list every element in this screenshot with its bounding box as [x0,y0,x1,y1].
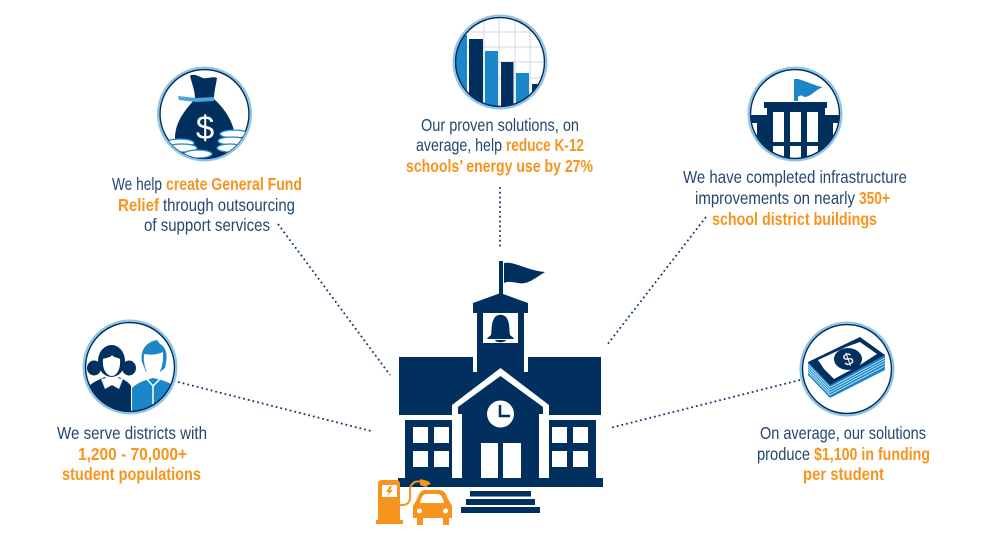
roof [399,357,601,415]
icon: money bag [158,68,251,160]
text: student populations [57,423,207,484]
icon: stack of money [800,322,894,416]
text: energy use: reduce K-12 [506,135,584,155]
dotted connector lines [178,187,800,431]
text: energy use: average, help [416,135,502,155]
flag [499,261,545,294]
text: energy use: schools’ energy use by 27% [406,156,593,176]
text: funding per student [757,423,930,484]
icon: students [84,320,176,415]
text: student populations: We serve districts with [57,423,207,443]
text: general fund relief: create General Fund [166,174,302,194]
icon: district building [748,68,842,165]
text: funding per student: $1,100 in funding [814,444,930,464]
text: general fund relief: through outsourcing [163,195,295,215]
base and steps [398,478,603,513]
text: general fund relief: of support services [144,215,270,235]
text: energy use: Our proven solutions, on [421,115,579,135]
text: student populations: student populations [62,464,201,484]
school building [398,261,603,513]
door [481,443,521,478]
icon: stack of money: $ [840,349,856,370]
bell tower [473,293,528,375]
text: infrastructure improvements: We have completed infrastructure [683,167,907,187]
icon: money bag: $ [196,109,214,146]
text: funding per student: On average, our solutions [760,423,926,443]
text: energy use [406,115,593,176]
text: infrastructure improvements [683,167,907,229]
text: funding per student: per student [803,464,884,484]
text: general fund relief: Relief [118,195,159,215]
icon: bar chart [454,15,546,110]
text: infrastructure improvements: improvements on nearly [695,188,855,208]
text: student populations: 1,200 - 70,000+ [78,444,187,464]
clock [487,400,514,428]
text: general fund relief: We help [112,174,162,194]
right wing with windows [544,420,596,478]
text: general fund relief [112,174,302,235]
text: funding per student: produce [757,444,810,464]
central gable [452,368,549,480]
text: infrastructure improvements: school district buildings [712,209,877,229]
left wing with windows [405,420,457,478]
text: infrastructure improvements: 350+ [859,188,890,208]
icon: EV charger and car [376,479,452,525]
